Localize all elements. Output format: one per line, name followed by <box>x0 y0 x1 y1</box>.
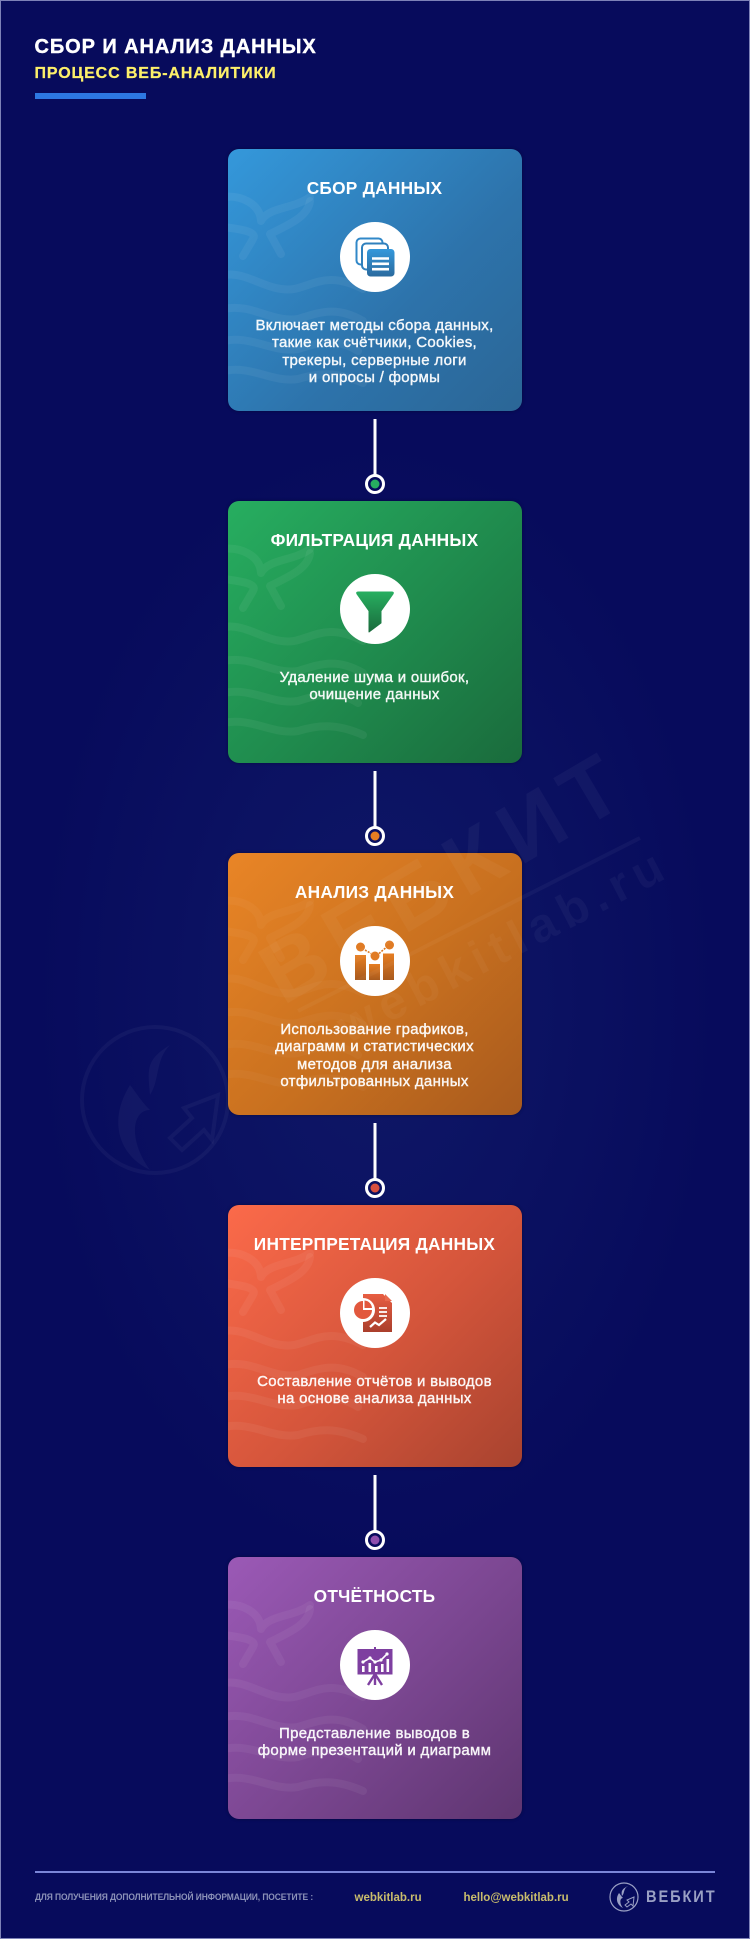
icon: funnel <box>340 574 410 644</box>
card description: методов для анализа <box>297 1056 452 1073</box>
footer divider <box>34 1870 714 1872</box>
card description: очищение данных <box>309 686 440 703</box>
icon: report <box>340 1278 410 1348</box>
card description: такие как счётчики, Cookies, <box>272 334 477 351</box>
card description <box>257 1373 492 1407</box>
card description: Представление выводов в <box>279 1725 470 1742</box>
subtitle: ПРОЦЕСС ВЕБ-АНАЛИТИКИ <box>34 65 276 82</box>
card: интерпретация данных <box>228 1205 522 1467</box>
card pattern <box>228 545 367 739</box>
footer <box>34 1871 717 1912</box>
card pattern <box>305 901 314 908</box>
connector 3 <box>365 1123 385 1198</box>
logo mark <box>609 1882 639 1912</box>
card description: трекеры, серверные логи <box>282 352 467 369</box>
card: сбор данных <box>228 149 522 411</box>
card pattern <box>228 193 367 387</box>
footer logo <box>609 1882 717 1912</box>
card description <box>258 1725 491 1759</box>
icon: bar chart <box>340 926 410 996</box>
card description: форме презентаций и диаграмм <box>258 1742 491 1759</box>
card pattern <box>228 1249 367 1443</box>
card description: на основе анализа данных <box>277 1390 472 1407</box>
card title: ФИЛЬТРАЦИЯ ДАННЫХ <box>271 530 478 550</box>
card description: Составление отчётов и выводов <box>257 1373 492 1390</box>
connector 4 <box>365 1475 385 1550</box>
card: анализ данных <box>228 853 522 1115</box>
card description: диаграмм и статистических <box>275 1038 474 1055</box>
card description <box>255 317 494 386</box>
footer link: website: webkitlab.ru <box>354 1892 422 1904</box>
icon: documents <box>340 222 410 292</box>
card title: АНАЛИЗ ДАННЫХ <box>295 882 454 902</box>
card: фильтрация данных <box>228 501 522 763</box>
card title: ИНТЕРПРЕТАЦИЯ ДАННЫХ <box>254 1234 495 1254</box>
card title: ОТЧЁТНОСТЬ <box>314 1586 435 1606</box>
accent bar <box>34 93 146 99</box>
icon: presentation board <box>340 1630 410 1700</box>
card pattern <box>228 1601 367 1795</box>
watermark: webkitlab.ru <box>327 840 672 1054</box>
header <box>34 36 317 99</box>
footer link: email: hello@webkitlab.ru <box>464 1892 569 1904</box>
card: отчётность <box>228 1557 522 1819</box>
footer note: ДЛЯ ПОЛУЧЕНИЯ ДОПОЛНИТЕЛЬНОЙ ИНФОРМАЦИИ, ПОСЕТИТЕ : <box>34 1892 313 1903</box>
connector 1 <box>365 419 385 494</box>
connector 2 <box>365 771 385 846</box>
card description: Использование графиков, <box>280 1021 469 1038</box>
card description: Включает методы сбора данных, <box>255 317 494 334</box>
card description: Удаление шума и ошибок, <box>280 669 469 686</box>
card description <box>280 669 469 703</box>
watermark: ВЕБКИТ <box>243 736 637 1022</box>
card description: отфильтрованных данных <box>280 1073 469 1090</box>
card description: и опросы / формы <box>309 369 440 386</box>
title: СБОР И АНАЛИЗ ДАННЫХ <box>34 36 317 58</box>
card title: СБОР ДАННЫХ <box>307 178 442 198</box>
logo wordmark: ВЕБКИТ <box>646 1887 717 1906</box>
card description <box>275 1021 474 1090</box>
